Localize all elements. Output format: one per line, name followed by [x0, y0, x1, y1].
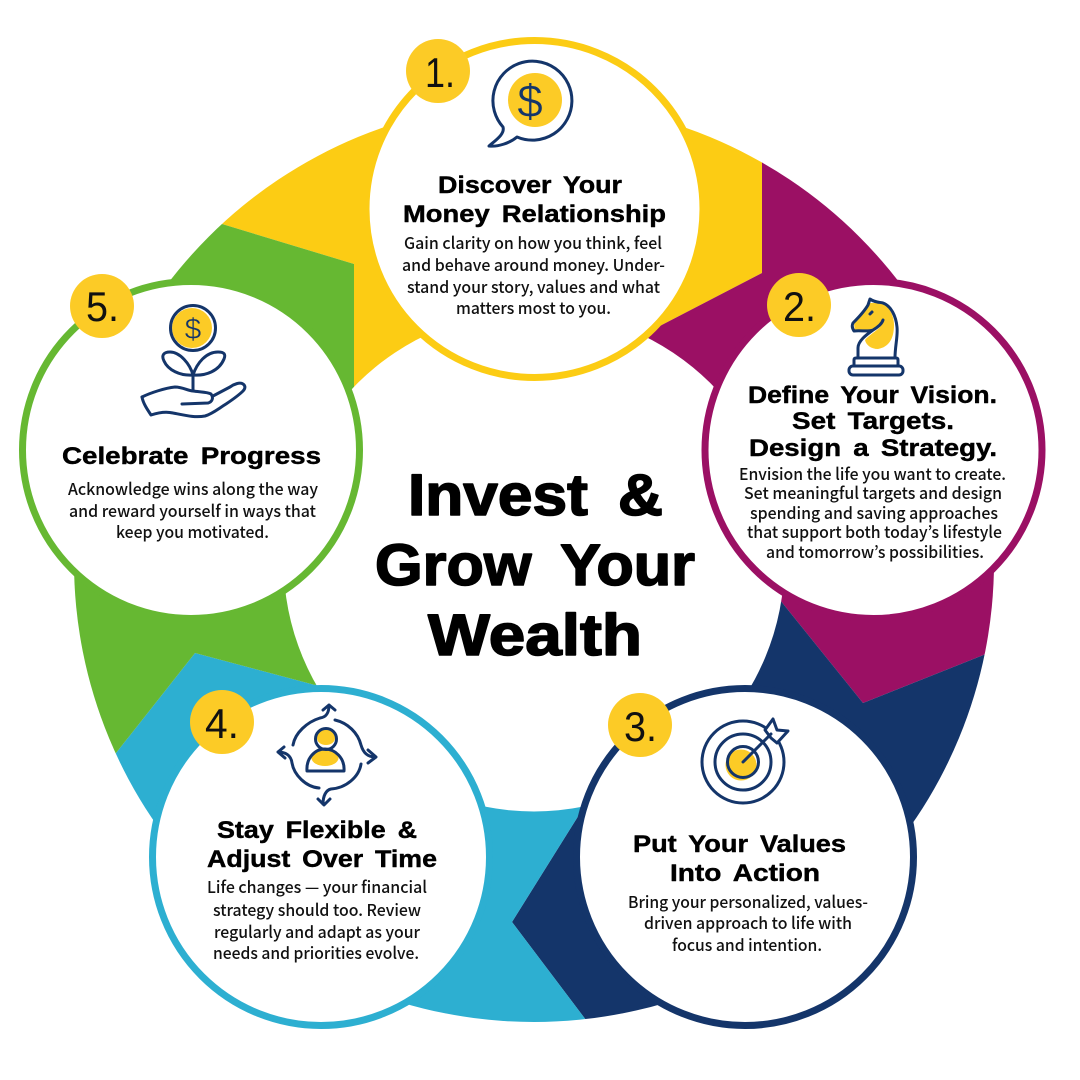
- panel: step 2: [705, 273, 1042, 618]
- title: Wealth: [428, 603, 642, 668]
- badge: 5: [70, 274, 134, 338]
- body text: Envision the life you want to create.: [739, 461, 1006, 485]
- heading: Adjust Over Time: [207, 846, 437, 873]
- heading: [748, 382, 997, 462]
- badge: 3: [608, 693, 672, 757]
- icon: speech bubble with dollar: $: [517, 75, 543, 127]
- heading: Put Your Values: [633, 831, 846, 858]
- body text: needs and priorities evolve.: [213, 940, 419, 964]
- title: [375, 463, 695, 668]
- icon: plant growing coin from hand: $: [185, 313, 202, 346]
- ring of coloured segments: [74, 127, 994, 1022]
- heading: Into Action: [670, 860, 820, 887]
- body text: [207, 874, 427, 964]
- icon: speech bubble with dollar: [489, 61, 572, 146]
- centre white disc: [284, 310, 784, 812]
- icon: chess knight: [849, 299, 903, 375]
- badge: 3: 3.: [624, 703, 657, 750]
- body text: [402, 230, 665, 319]
- heading: Design a Strategy.: [749, 435, 997, 462]
- body text: [68, 476, 318, 543]
- panel: step 5: [22, 274, 360, 618]
- badge: 1: 1.: [425, 49, 455, 96]
- panel: step 4: [152, 688, 490, 1026]
- heading: Money Relationship: [403, 201, 666, 228]
- body text: driven approach to life with: [644, 910, 852, 934]
- body text: Acknowledge wins along the way: [68, 476, 318, 500]
- segment: teal: [116, 653, 586, 1022]
- panel: step 3: [576, 688, 914, 1026]
- body text: Gain clarity on how you think, feel: [404, 230, 662, 254]
- body text: [739, 461, 1006, 563]
- badge: 2: [767, 273, 831, 337]
- body text: Set meaningful targets and design: [744, 480, 1002, 504]
- badge: 2: 2.: [783, 283, 816, 330]
- body text: spending and saving approaches: [750, 500, 998, 524]
- body text: that support both today’s lifestyle: [747, 519, 1002, 543]
- body text: stand your story, values and what: [407, 274, 660, 298]
- body text: and behave around money. Under-: [402, 252, 665, 276]
- body text: and reward yourself in ways that: [69, 498, 316, 522]
- body text: keep you motivated.: [116, 519, 269, 543]
- heading: [633, 831, 846, 887]
- heading: [403, 172, 666, 228]
- body text: and tomorrow’s possibilities.: [766, 539, 984, 563]
- badge: 4: 4.: [205, 700, 239, 747]
- segment: magenta: [648, 162, 994, 703]
- title: Invest &: [408, 463, 663, 528]
- badge: 1: [406, 39, 470, 103]
- heading: Stay Flexible &: [217, 817, 417, 844]
- heading: Discover Your: [438, 172, 623, 199]
- segment: green: [74, 224, 354, 754]
- icon: plant growing coin from hand: [142, 306, 245, 417]
- body text: matters most to you.: [456, 295, 611, 319]
- heading: Celebrate Progress: [62, 443, 321, 470]
- heading: Set Targets.: [792, 408, 954, 435]
- segment: yellow: [222, 127, 762, 387]
- title: Grow Your: [375, 533, 695, 598]
- badge: 4: [190, 690, 254, 754]
- body text: strategy should too. Review: [213, 897, 421, 921]
- segment: navy: [512, 601, 985, 1019]
- badge: 5: 5.: [86, 283, 119, 330]
- icon: person with circular arrows: [278, 705, 376, 805]
- panel: step 1: [366, 39, 703, 378]
- heading: Define Your Vision.: [748, 382, 997, 409]
- body text: Bring your personalized, values-: [628, 889, 868, 913]
- body text: focus and intention.: [672, 932, 822, 956]
- body text: regularly and adapt as your: [214, 919, 420, 943]
- icon: target with arrow: [702, 719, 788, 803]
- heading: [207, 817, 437, 873]
- body text: Life changes — your financial: [207, 874, 427, 898]
- body text: [628, 889, 868, 956]
